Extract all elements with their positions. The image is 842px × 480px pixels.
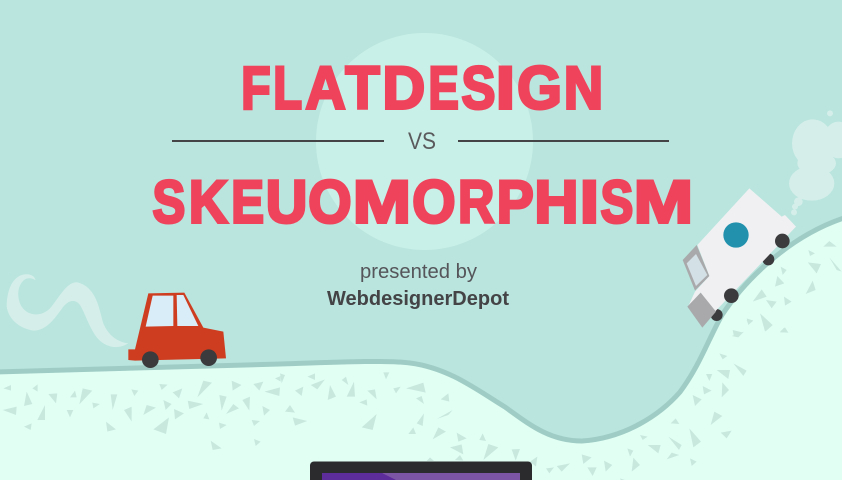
title: Flat Design: L	[273, 54, 302, 122]
WebdesignerDepot: WebdesignerDepot	[327, 288, 509, 310]
car exhaust smoke	[7, 274, 128, 347]
title: Flat Design: G	[517, 54, 562, 122]
confetti triangles: right upper	[732, 241, 842, 337]
title: Flat Design: A	[306, 54, 346, 122]
title: Skeuomorphism: P	[497, 168, 534, 236]
title: Skeuomorphism: U	[266, 168, 307, 236]
background circle	[316, 33, 533, 250]
title: Skeuomorphism: S	[600, 168, 633, 236]
hill ground	[0, 217, 842, 480]
divider right	[458, 140, 669, 142]
title: Skeuomorphism: H	[534, 168, 578, 236]
title: Skeuomorphism: I	[580, 168, 599, 236]
title: Flat Design: F	[241, 54, 271, 122]
title: Flat Design: S	[462, 54, 495, 122]
laptop	[310, 462, 532, 480]
title: Skeuomorphism: O	[412, 168, 456, 236]
confetti triangles: right lower	[582, 320, 788, 480]
vs label: VS	[408, 128, 436, 155]
title: Skeuomorphism: R	[458, 168, 494, 236]
van exhaust smoke	[789, 110, 842, 215]
title: Skeuomorphism: M	[634, 168, 693, 236]
title: Flat Design: T	[345, 54, 380, 122]
title: Flat Design: N	[564, 54, 603, 122]
white van	[683, 188, 796, 328]
title: Flat Design: I	[496, 54, 515, 122]
title: Flat Design: E	[428, 54, 459, 122]
confetti triangles: centre	[280, 372, 570, 473]
title: Skeuomorphism: S	[152, 168, 185, 236]
presented by: presented by	[360, 261, 477, 283]
title: Skeuomorphism: E	[231, 168, 264, 236]
confetti triangles: left	[3, 376, 281, 450]
title: Skeuomorphism: K	[189, 168, 228, 236]
divider left	[172, 140, 384, 142]
red car	[128, 293, 226, 368]
title: Skeuomorphism: M	[353, 168, 411, 236]
title: Flat Design: D	[382, 54, 425, 122]
title: Skeuomorphism: O	[308, 168, 352, 236]
